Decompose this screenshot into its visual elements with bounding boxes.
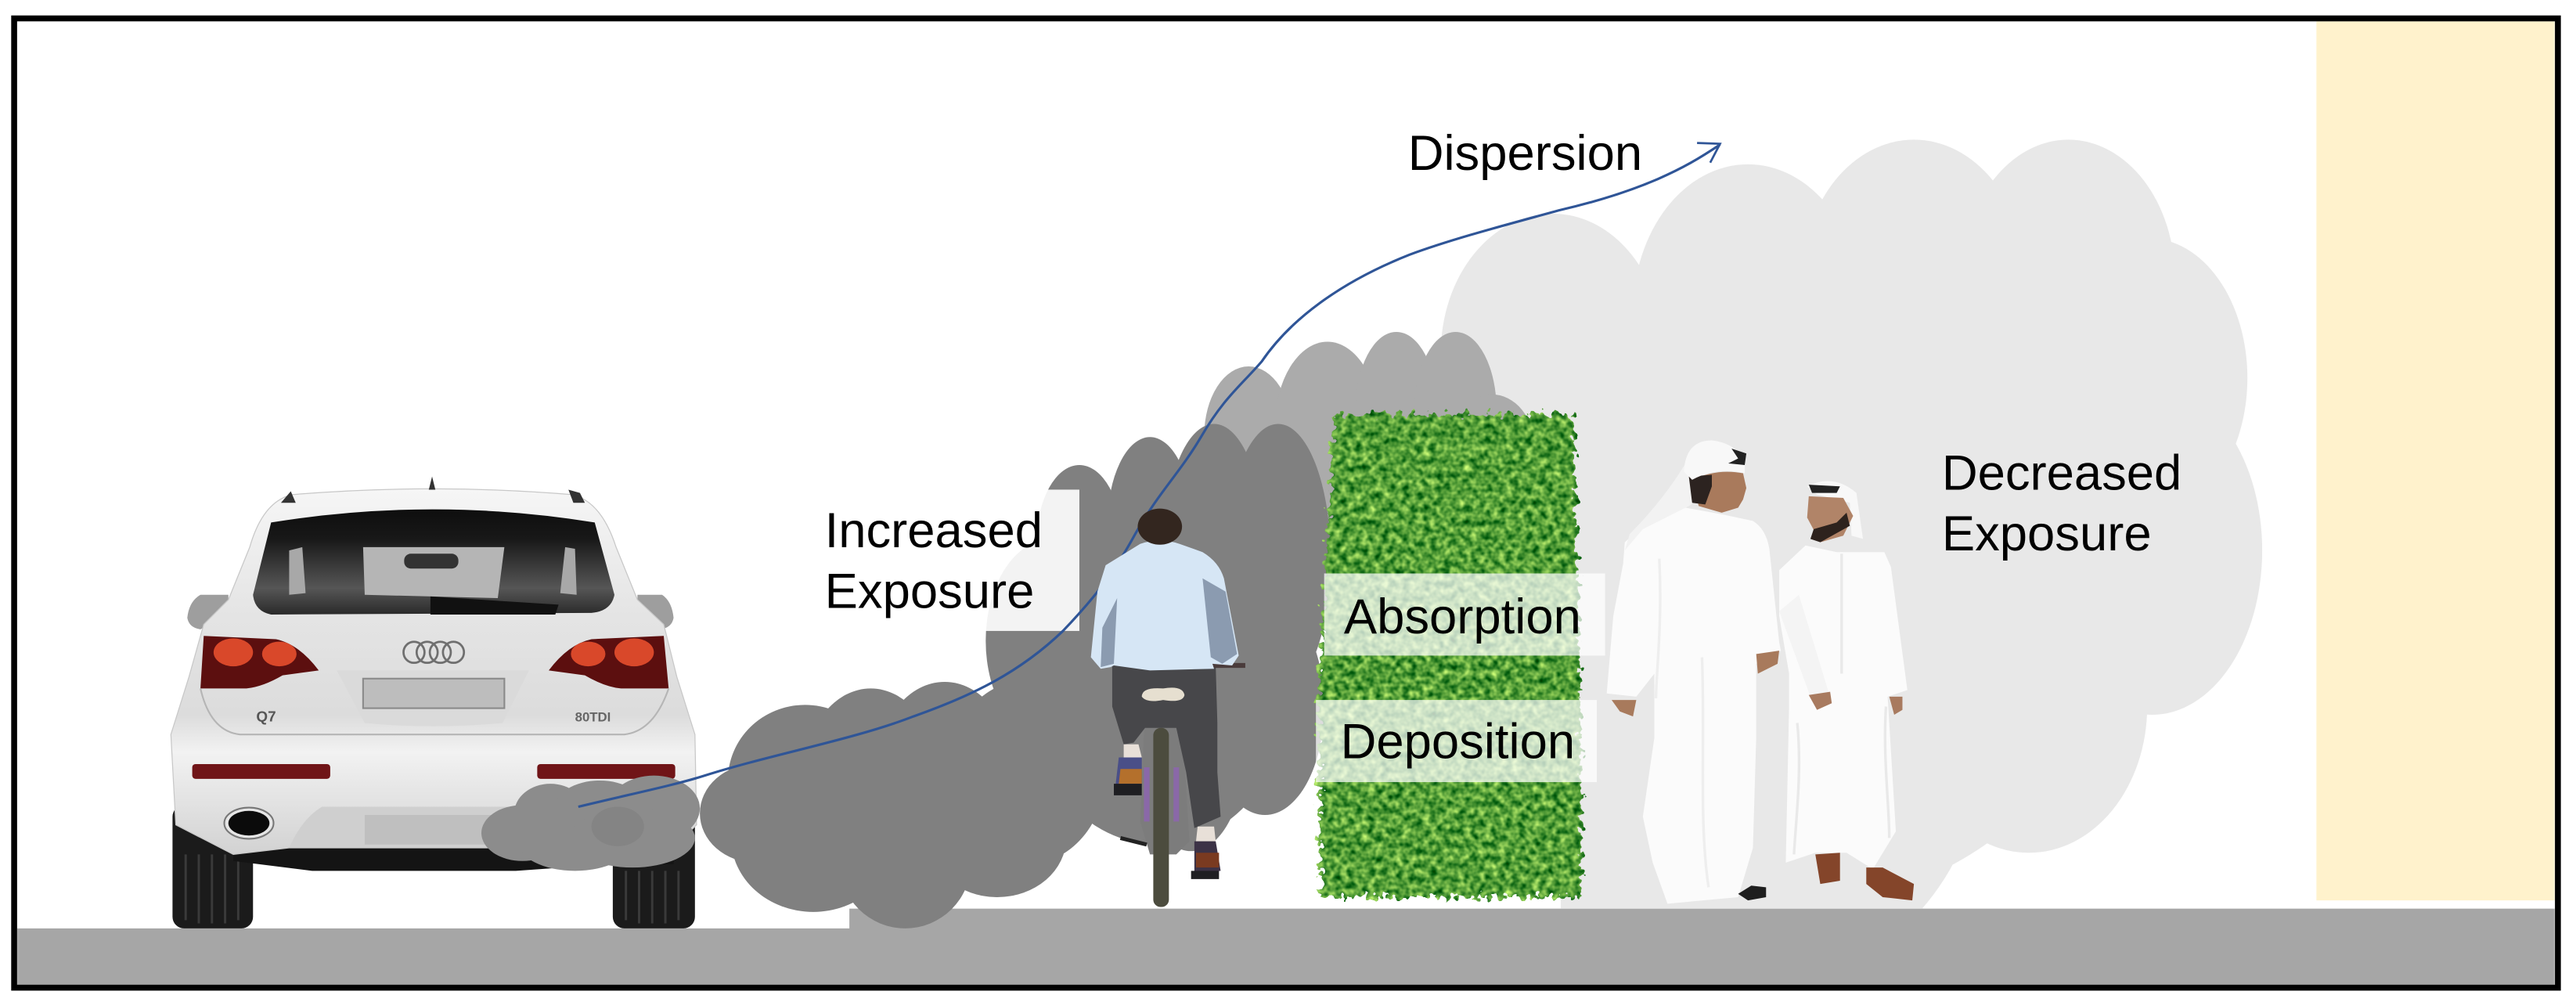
man one cap — [1684, 440, 1745, 480]
car badge Q7: Q7 — [256, 709, 276, 725]
man one — [1607, 440, 1781, 903]
bicycle wheel — [1153, 728, 1169, 907]
car body — [171, 489, 697, 854]
label: deposition — [1316, 700, 1597, 782]
men walking — [1607, 440, 1914, 903]
label: decreased exposure: Exposure — [1942, 507, 2152, 561]
car underside — [233, 848, 674, 871]
man two robe folds — [1794, 553, 1890, 854]
cloud: light dispersed pollution — [1441, 139, 2262, 909]
car interior mirror — [404, 553, 459, 568]
bicycle saddle — [1142, 687, 1184, 701]
car — [171, 477, 697, 928]
man two arm — [1779, 595, 1828, 697]
handlebar — [1212, 665, 1245, 667]
car number plate — [337, 670, 529, 727]
rider shoes — [1115, 758, 1142, 785]
cyclist — [1091, 509, 1245, 907]
text: absorption: Absorption — [1344, 590, 1581, 644]
rider trousers — [1112, 665, 1220, 828]
car roof rails and aerial — [281, 477, 585, 503]
man two hands — [1809, 692, 1902, 715]
rider head — [1137, 509, 1182, 545]
cloud: medium pollution behind hedge — [1204, 332, 1534, 526]
car reflectors — [193, 764, 330, 779]
car window reflection — [363, 547, 504, 598]
text: increased exposure: Exposure — [825, 564, 1034, 619]
man two — [1779, 481, 1914, 900]
cloud: exhaust puff — [481, 776, 700, 871]
text: increased exposure: Increased — [825, 503, 1043, 558]
label: increased exposure — [813, 489, 1079, 631]
dispersion arrow — [578, 143, 1720, 807]
label backing — [813, 489, 1079, 631]
car exhaust — [225, 808, 273, 838]
man one robe — [1607, 508, 1781, 903]
man two head wrap — [1807, 481, 1863, 539]
text: deposition: Deposition — [1341, 715, 1575, 770]
label: absorption — [1324, 573, 1605, 655]
man one face — [1692, 472, 1746, 513]
hedge — [1317, 414, 1582, 897]
car rings logo — [403, 642, 464, 663]
cloud: dense pollution near cyclist — [700, 424, 1331, 928]
label: dispersion: Dispersion — [1408, 126, 1642, 181]
road — [17, 909, 2555, 985]
label: decreased exposure: Decreased — [1942, 445, 2181, 500]
rider socks — [1124, 745, 1216, 842]
man one hands — [1612, 651, 1779, 716]
absorption backing — [1324, 573, 1605, 655]
car rear window — [253, 510, 614, 615]
man one sandal — [1738, 885, 1766, 900]
man one veil — [1625, 463, 1709, 550]
car bumper insert — [289, 807, 526, 848]
car wiper — [431, 597, 559, 615]
bicycle fender and frame — [1140, 706, 1190, 854]
man one robe folds — [1656, 559, 1709, 887]
car badge TDI: 80TDI — [575, 709, 611, 724]
man two face — [1807, 496, 1853, 543]
shirt sleeve shading — [1101, 579, 1237, 667]
man two robe — [1779, 546, 1908, 869]
rider shirt — [1091, 541, 1239, 670]
car wheels — [172, 805, 695, 928]
building — [2316, 21, 2555, 900]
deposition backing — [1316, 700, 1597, 782]
car boot line — [200, 688, 668, 734]
car side mirrors — [187, 595, 229, 629]
man two sandals — [1815, 853, 1914, 900]
car tail lights — [200, 636, 668, 688]
